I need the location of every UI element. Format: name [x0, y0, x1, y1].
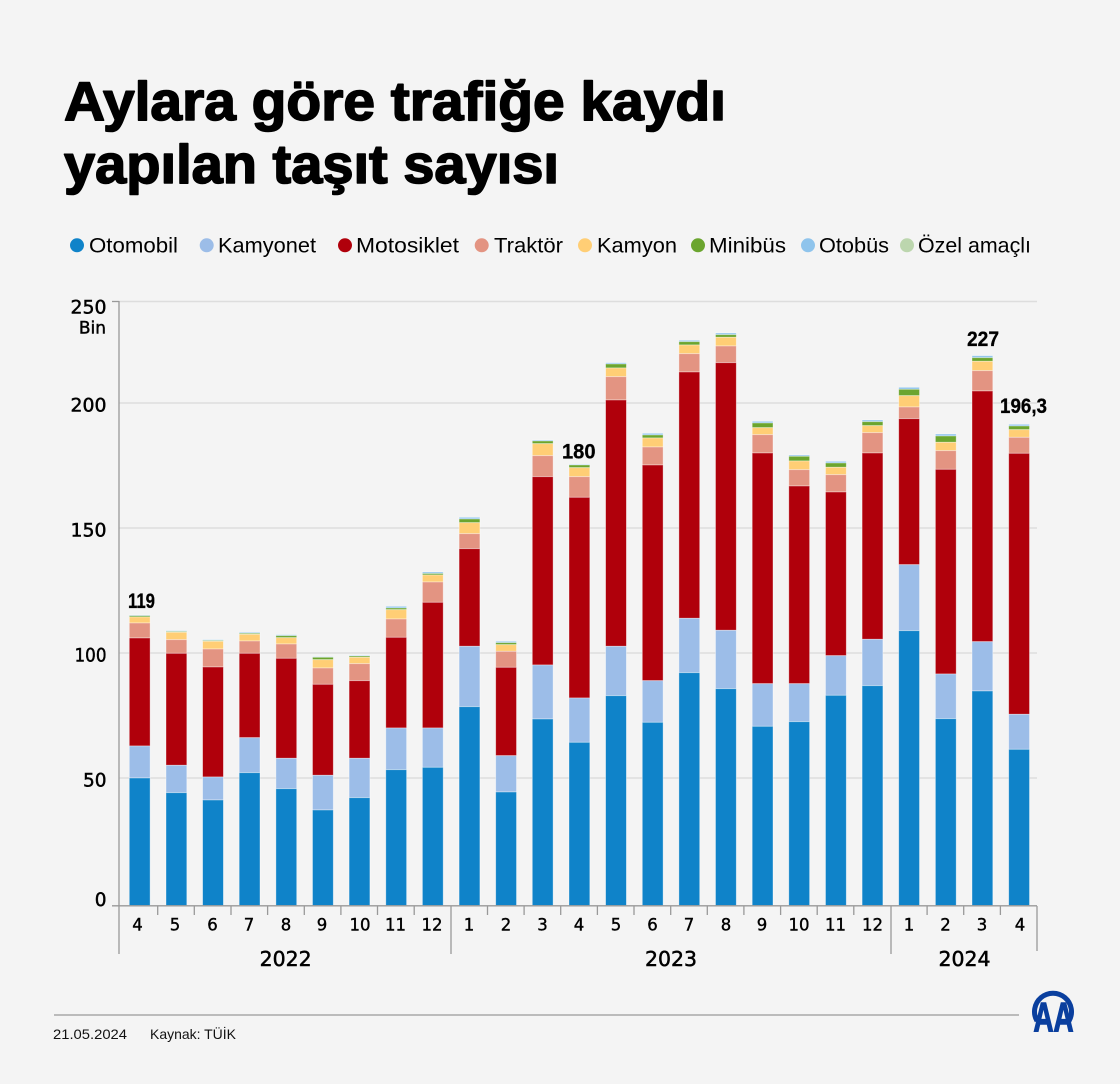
bar chart [129, 333, 1030, 906]
legend: Traktör [494, 234, 563, 258]
bar: 2023 month 6 [642, 433, 663, 906]
footer: date and source [53, 1025, 237, 1042]
bar: 2024 month 1 [899, 387, 920, 906]
bar: 2023 month 2 [496, 641, 516, 906]
value callouts: 180 [562, 440, 596, 464]
value callouts [128, 328, 1047, 613]
bar: 2022 month 12 [422, 572, 443, 906]
bar: 2022 month 10 [349, 655, 370, 906]
month labels: 5 [611, 916, 621, 934]
month labels: 12 [422, 916, 442, 934]
month labels: 4 [574, 916, 584, 934]
bar: 2022 month 9 [312, 657, 333, 906]
bar: 2023 month 4 [569, 464, 590, 906]
y axis labels: 100 [74, 646, 106, 666]
legend [70, 234, 1031, 258]
bar: 2023 month 11 [826, 461, 846, 906]
month labels: 11 [385, 916, 406, 934]
month labels: 2 [940, 916, 951, 934]
y axis labels: 50 [83, 770, 106, 792]
month labels [132, 916, 1025, 934]
month labels: 5 [170, 916, 180, 934]
bar: 2023 month 5 [606, 363, 626, 906]
icon: AA logo: AA [1034, 994, 1074, 1040]
bar: 2022 month 7 [239, 632, 260, 906]
bar: 2023 month 10 [789, 455, 810, 906]
bar: 2023 month 7 [679, 340, 700, 906]
month labels: 7 [244, 916, 254, 934]
month labels: 10 [350, 916, 370, 934]
month labels: 8 [721, 916, 731, 934]
month labels: 9 [757, 916, 767, 934]
month labels: 12 [862, 916, 883, 934]
value callouts: 196,3 [1000, 395, 1047, 418]
value callouts: 119 [128, 590, 155, 613]
value callouts: 227 [967, 328, 999, 351]
year labels [260, 947, 990, 971]
year labels: 2022 [260, 947, 312, 971]
bar: 2022 month 4 [129, 615, 150, 906]
y axis labels: 250 [70, 298, 106, 318]
axes and ticks [112, 301, 1037, 954]
month labels: 3 [977, 916, 987, 934]
month labels: 4 [1015, 916, 1025, 934]
month labels: 3 [537, 916, 548, 934]
bar: 2022 month 11 [386, 606, 407, 906]
legend: Kamyon [597, 234, 677, 258]
bar: 2023 month 1 [459, 517, 480, 906]
month labels: 10 [788, 916, 810, 934]
month labels: 1 [904, 916, 914, 934]
footer: date and source: Kaynak: TÜİK [150, 1025, 237, 1042]
month labels: 2 [501, 916, 511, 934]
footer: date and source: 21.05.2024 [53, 1026, 127, 1042]
year labels: 2023 [645, 947, 697, 971]
month labels: 7 [684, 916, 694, 934]
y axis labels: 200 [70, 396, 106, 416]
month labels: 6 [647, 916, 658, 934]
bar: 2023 month 9 [752, 421, 773, 906]
title: yapılan taşıt sayısı [64, 133, 559, 195]
bar: 2022 month 8 [276, 635, 297, 906]
legend: Kamyonet [218, 234, 316, 258]
y axis labels: 150 [70, 520, 106, 542]
legend: Özel amaçlı [918, 234, 1031, 258]
bar: 2022 month 6 [203, 640, 223, 906]
bar: 2023 month 8 [716, 333, 736, 906]
month labels: 8 [281, 916, 291, 934]
month labels: 4 [132, 916, 143, 934]
bar: 2022 month 5 [166, 631, 187, 906]
bar: 2023 month 3 [532, 440, 553, 906]
icon: AA logo [1034, 993, 1074, 1040]
legend: Motosiklet [356, 234, 459, 258]
y axis labels: Bin [79, 318, 106, 338]
month labels: 6 [207, 916, 218, 934]
month labels: 1 [464, 916, 474, 934]
legend: Otobüs [819, 234, 889, 258]
y axis labels: 0 [95, 890, 106, 911]
y axis labels [70, 298, 106, 911]
legend: Otomobil [89, 234, 178, 258]
bar: 2024 month 4 [1009, 424, 1030, 906]
bar: 2024 month 3 [972, 356, 993, 906]
year labels: 2024 [938, 947, 990, 971]
month labels: 11 [825, 916, 846, 934]
bar: 2023 month 12 [862, 420, 883, 906]
title: Aylara göre trafiğe kaydı [64, 70, 726, 132]
legend: Minibüs [709, 234, 786, 258]
bar: 2024 month 2 [935, 434, 956, 906]
title [64, 70, 726, 195]
month labels: 9 [317, 916, 327, 934]
